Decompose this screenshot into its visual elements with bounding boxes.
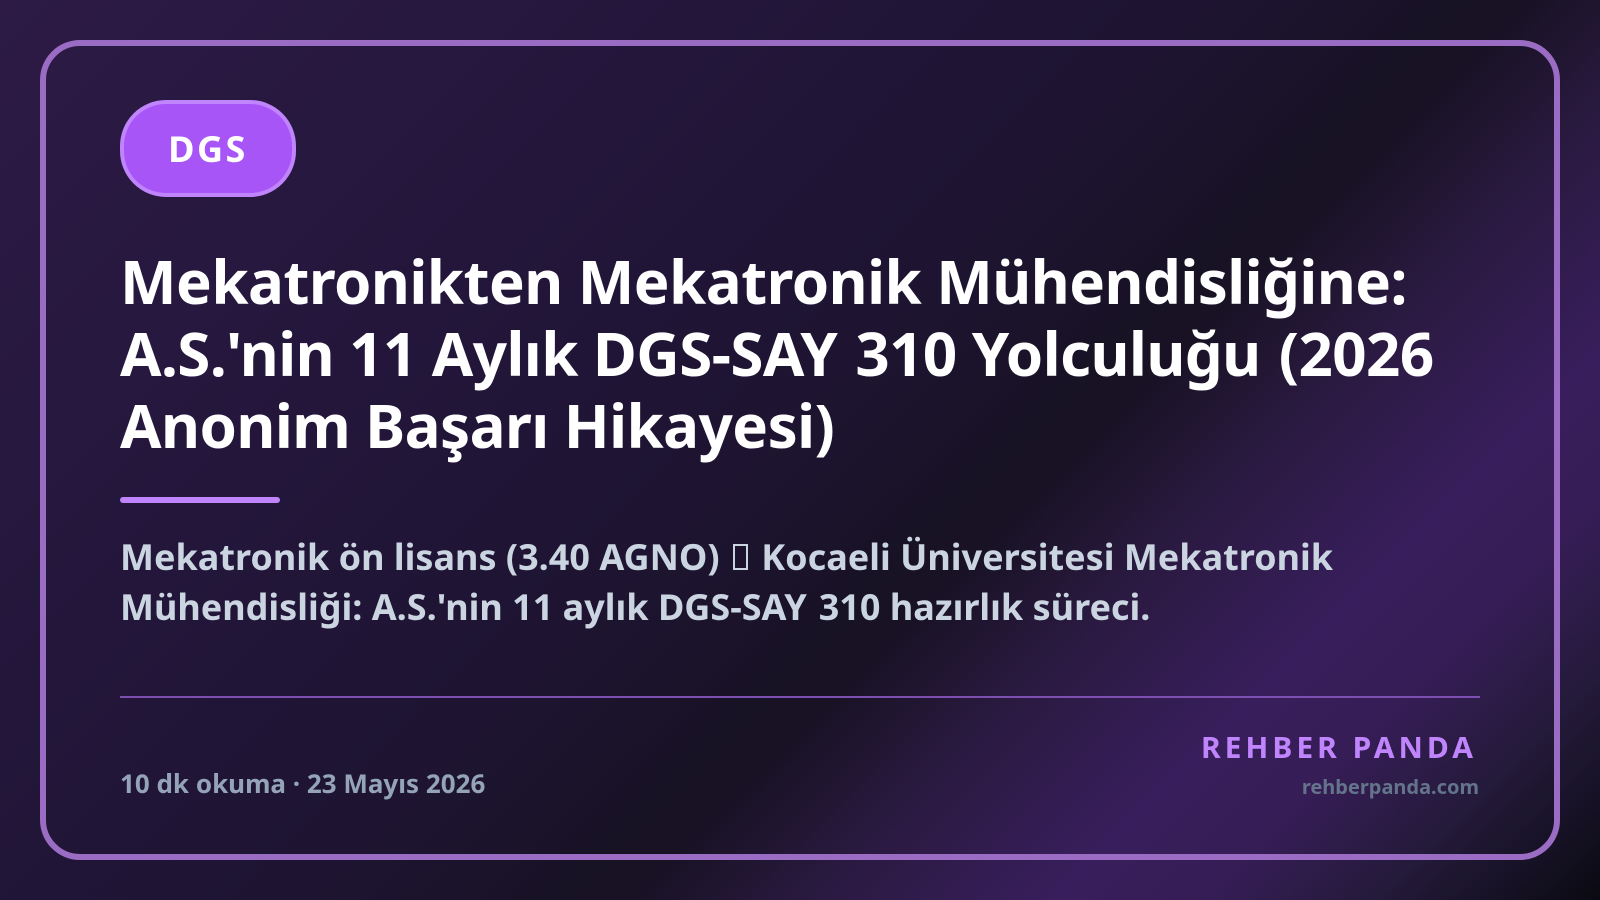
- accent rule: [120, 497, 280, 503]
- title: A.S.'nin 11 Aylık DGS-SAY 310 Yolculuğu (2026: [120, 312, 1434, 394]
- brand block: [1201, 726, 1479, 800]
- badge: DGS: DGS: [168, 124, 248, 173]
- subtitle: Mühendisliği: A.S.'nin 11 aylık DGS-SAY 310 hazırlık süreci.: [120, 582, 1150, 631]
- footer divider: [120, 696, 1480, 698]
- brand name: REHBER PANDA: [1201, 726, 1477, 767]
- reading meta: 10 dk okuma · 23 Mayıs 2026: [120, 765, 485, 801]
- brand url: rehberpanda.com: [1302, 773, 1479, 800]
- title: [120, 240, 1434, 466]
- title: Anonim Başarı Hikayesi): [120, 384, 834, 466]
- subtitle: Mekatronik ön lisans (3.40 AGNO) Kocaeli Üniversitesi Mekatronik: [120, 532, 1333, 581]
- badge: DGS: [120, 100, 296, 197]
- title: Mekatronikten Mekatronik Mühendisliğine:: [120, 240, 1407, 322]
- subtitle: [120, 532, 1333, 631]
